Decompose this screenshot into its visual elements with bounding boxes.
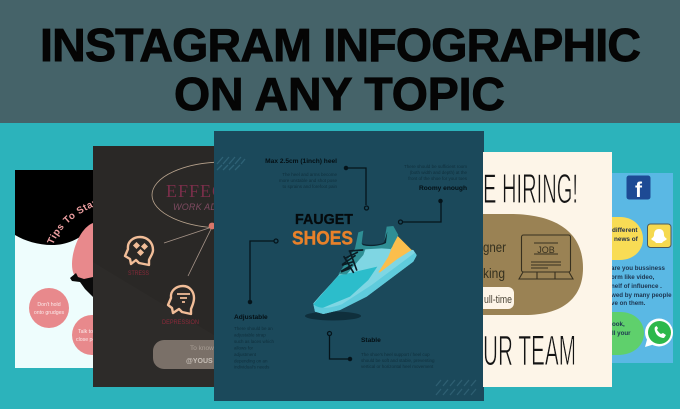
label: depression: DEPRESSION <box>162 319 199 326</box>
upper <box>313 247 417 314</box>
role text: king <box>483 265 505 281</box>
callout: adjustable: adjustable strap <box>234 332 266 338</box>
icon: snapchat <box>648 224 671 248</box>
circle tip two <box>72 315 93 355</box>
heel tab <box>384 226 398 249</box>
icon: meditating figure <box>70 273 93 297</box>
full-time pill <box>483 287 514 309</box>
arrow: room <box>398 199 442 224</box>
title: ON ANY TOPIC <box>174 68 505 120</box>
arrow: stable <box>328 332 352 361</box>
role text <box>484 244 506 281</box>
connector lines <box>164 227 212 276</box>
shoe title <box>292 211 353 250</box>
sole <box>313 253 417 314</box>
callout: stable <box>361 337 435 369</box>
panel: hiring card: UR TEAM <box>483 327 576 375</box>
shoe title: SHOES <box>292 228 353 250</box>
panel: hiring card: E HIRING! <box>483 165 578 212</box>
callout: heel: Max 2.5cm (1inch) heel <box>265 158 337 165</box>
callout: adjustable: depending on an <box>234 358 268 364</box>
icon: facebook <box>626 176 650 202</box>
heading: EFFEC <box>166 181 225 201</box>
panel: effects card <box>93 146 214 387</box>
panel: sneaker card <box>214 131 484 401</box>
callout: stable: Stable <box>361 337 381 344</box>
callout: room: (both width and depth) at the <box>410 170 467 175</box>
body text: nelf of influence . <box>611 283 662 290</box>
icon: facebook: f <box>635 179 643 202</box>
icon: depression head <box>168 286 194 314</box>
title <box>40 19 641 120</box>
panel: tips card <box>15 170 93 368</box>
callout: heel <box>265 158 337 189</box>
circle tip one <box>29 288 69 328</box>
hatch bottom right <box>436 380 476 395</box>
title: INSTAGRAM INFOGRAPHIC <box>40 19 641 71</box>
body text: orm like video, <box>611 274 655 281</box>
shoe shadow <box>305 312 361 320</box>
callout: heel: more unstable and shot pose <box>279 178 337 183</box>
header band <box>0 0 680 123</box>
yellow bubble: news of <box>614 236 639 243</box>
laces <box>342 250 363 272</box>
tongue and eyelet band <box>338 231 366 274</box>
panel: social card <box>612 173 673 363</box>
green bubble: ook, <box>612 321 625 328</box>
shoe title: FAUGET <box>295 211 353 228</box>
arrow: adjustable <box>248 239 278 304</box>
brown blob <box>483 214 583 315</box>
callout: adjustable: adjustment <box>234 352 257 357</box>
callout: room: front of the shoe for your toes <box>408 176 468 181</box>
callout: stable: vertical or horizontal heel movement <box>361 364 434 369</box>
callout: heel: The heel and arms become <box>282 172 337 177</box>
heel panel <box>378 235 412 272</box>
body text <box>610 265 672 307</box>
ellipse outline <box>152 162 214 228</box>
callout: room <box>404 164 468 192</box>
label: stress: STRESS <box>128 270 150 277</box>
callout: stable: should be soft and stable, preventing <box>361 358 435 363</box>
full-time pill: ull-time <box>484 294 512 306</box>
callout: room: There should be sufficient room <box>404 164 467 169</box>
icon: whatsapp <box>645 318 673 347</box>
icon: sneaker <box>313 226 417 314</box>
circle tip one: Don't hold <box>37 302 61 308</box>
body text: wed by many people <box>610 292 672 299</box>
toe panel <box>313 267 377 309</box>
callout: adjustable <box>234 314 275 370</box>
callout: stable: The shoe's heel support / heel cup <box>361 352 430 357</box>
circle tip two: close pe <box>76 337 95 343</box>
icon: stress head <box>125 237 153 265</box>
green bubble <box>612 312 644 355</box>
yellow bubble: different <box>612 227 638 234</box>
callout: adjustable: There should be an <box>234 326 273 331</box>
yellow bubble <box>612 217 643 260</box>
black curved top <box>15 170 93 245</box>
call to action pill <box>153 340 214 369</box>
callout: heel: to sprains and forefoot pain <box>282 184 337 189</box>
curved heading: Tips To Stay <box>46 201 93 243</box>
circle tip two: Talk to <box>78 329 93 335</box>
body text: are you bussiness <box>611 265 666 272</box>
call to action pill: @YOUS <box>186 358 213 365</box>
call to action pill: To know <box>190 345 214 352</box>
callout: adjustable: Adjustable <box>234 314 268 321</box>
circle tip one: onto grudges <box>34 310 65 316</box>
subheading: WORK AD <box>173 202 217 212</box>
role text: gner <box>483 239 506 255</box>
collar band <box>363 243 391 249</box>
callout: adjustable: individual's needs <box>234 364 270 370</box>
pink blob <box>72 223 93 279</box>
icon: laptop <box>519 235 573 279</box>
body text: ve on them. <box>611 300 646 307</box>
green bubble: ll your <box>612 330 631 337</box>
collar opening <box>362 232 387 246</box>
panel: hiring card <box>470 152 612 387</box>
arrow: heel <box>344 166 368 210</box>
icon: laptop: JOB <box>537 245 555 255</box>
callout: adjustable: allows for <box>234 346 254 350</box>
hatch top left <box>217 157 245 170</box>
callout: adjustable: such as laces which <box>234 339 275 344</box>
callout: room: Roomy enough <box>419 185 467 192</box>
